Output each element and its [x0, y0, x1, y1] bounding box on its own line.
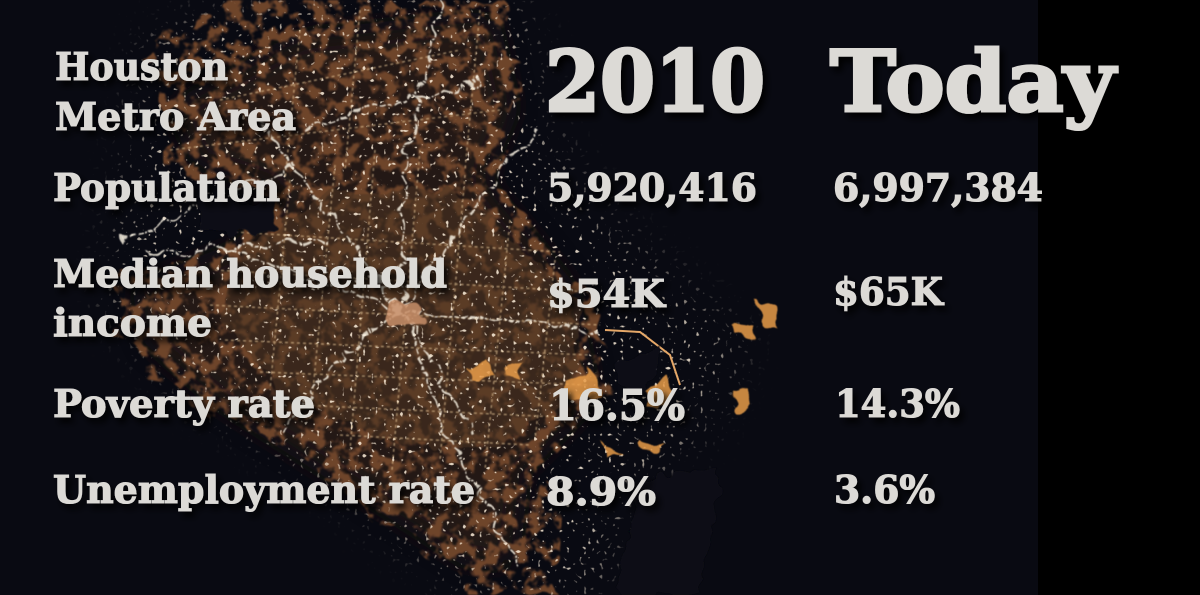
- row: population: 5,920,416: [547, 165, 757, 210]
- heading: Houston Metro Area: Metro Area: [55, 94, 296, 139]
- row: population: [53, 165, 1043, 210]
- column heading: 2010: 2010: [545, 32, 765, 131]
- road grid: [170, 10, 600, 470]
- row: poverty rate: [53, 381, 960, 430]
- row: median household income: $65K: [833, 269, 945, 314]
- suburban patches: [115, 0, 610, 595]
- black strip on the right: [1038, 0, 1200, 595]
- column heading: Today: Today: [830, 32, 1117, 131]
- row: median household income: income: [53, 300, 212, 345]
- ship channel: [605, 330, 680, 385]
- row: population: Population: [53, 165, 280, 210]
- suburban glow: [140, 20, 590, 560]
- row: median household income: $54K: [547, 271, 667, 316]
- row: poverty rate: 14.3%: [835, 381, 960, 426]
- row: median household income: [53, 251, 945, 345]
- row: unemployment rate: 8.9%: [546, 469, 656, 514]
- inner city fill: [220, 190, 580, 450]
- dark lakes: [195, 195, 720, 595]
- heading: Houston Metro Area: [55, 44, 296, 139]
- speckled lights: [110, 0, 740, 595]
- bright orange patches: [387, 300, 778, 460]
- row: population: 6,997,384: [833, 165, 1043, 210]
- row: poverty rate: Poverty rate: [53, 381, 315, 426]
- row: median household income: Median household: [53, 251, 447, 296]
- heading: Houston Metro Area: Houston: [55, 44, 228, 89]
- main highways: [120, 0, 600, 570]
- row: unemployment rate: Unemployment rate: [53, 467, 475, 512]
- row: poverty rate: 16.5%: [549, 381, 685, 430]
- satellite map of Houston at night: [110, 0, 778, 595]
- row: unemployment rate: 3.6%: [834, 467, 935, 512]
- row: unemployment rate: [53, 467, 935, 514]
